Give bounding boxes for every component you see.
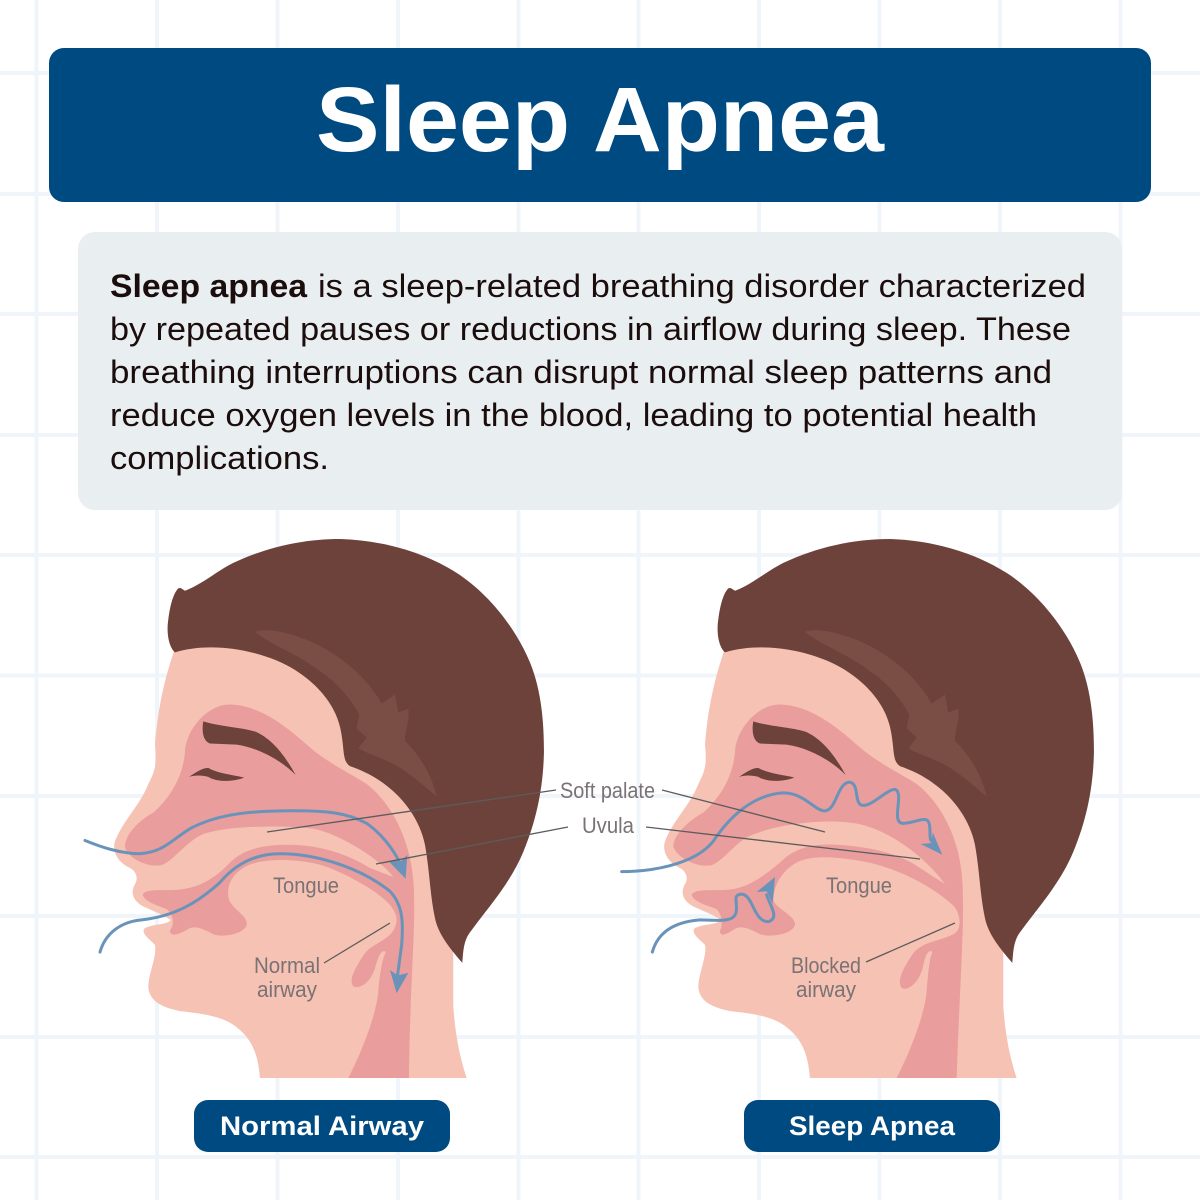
label: Blocked airway: Blocked [791,953,861,978]
label: Normal airway: airway [257,977,317,1002]
badge: Normal Airway: Normal Airway [220,1111,424,1141]
panel: definition text: breathing interruptions can disrupt normal sleep patterns and [110,354,1052,390]
label: Blocked airway: airway [796,977,856,1002]
label: Normal airway: Normal [254,953,320,978]
label: Uvula with leader lines: Uvula [582,813,635,838]
panel: definition text: reduce oxygen levels in the blood, leading to potential health [110,397,1037,433]
title banner [49,48,1151,202]
badge: Sleep Apnea [744,1100,1000,1152]
diagram: sleep apnea head [622,539,1094,1078]
label: Normal airway [254,923,390,1002]
label: Uvula with leader lines [376,813,920,864]
title banner: Sleep Apnea [316,69,885,171]
panel: definition text: is a sleep-related breathing disorder characterized [318,268,1086,304]
label: Tongue (apnea): Tongue [826,873,892,898]
panel: definition text: Sleep apnea [110,268,307,304]
diagram: normal airway head [85,539,544,1078]
badge: Normal Airway [194,1100,450,1152]
label: Soft palate with leader lines [267,778,825,832]
panel: definition text: complications. [110,440,329,476]
badge: Sleep Apnea: Sleep Apnea [789,1111,956,1141]
label: Soft palate with leader lines: Soft palate [560,778,655,803]
panel: definition text: by repeated pauses or reductions in airflow during sleep. These [110,311,1071,347]
label: Tongue (normal): Tongue [273,873,339,898]
label: Blocked airway [791,923,955,1002]
panel: definition text [78,232,1122,510]
